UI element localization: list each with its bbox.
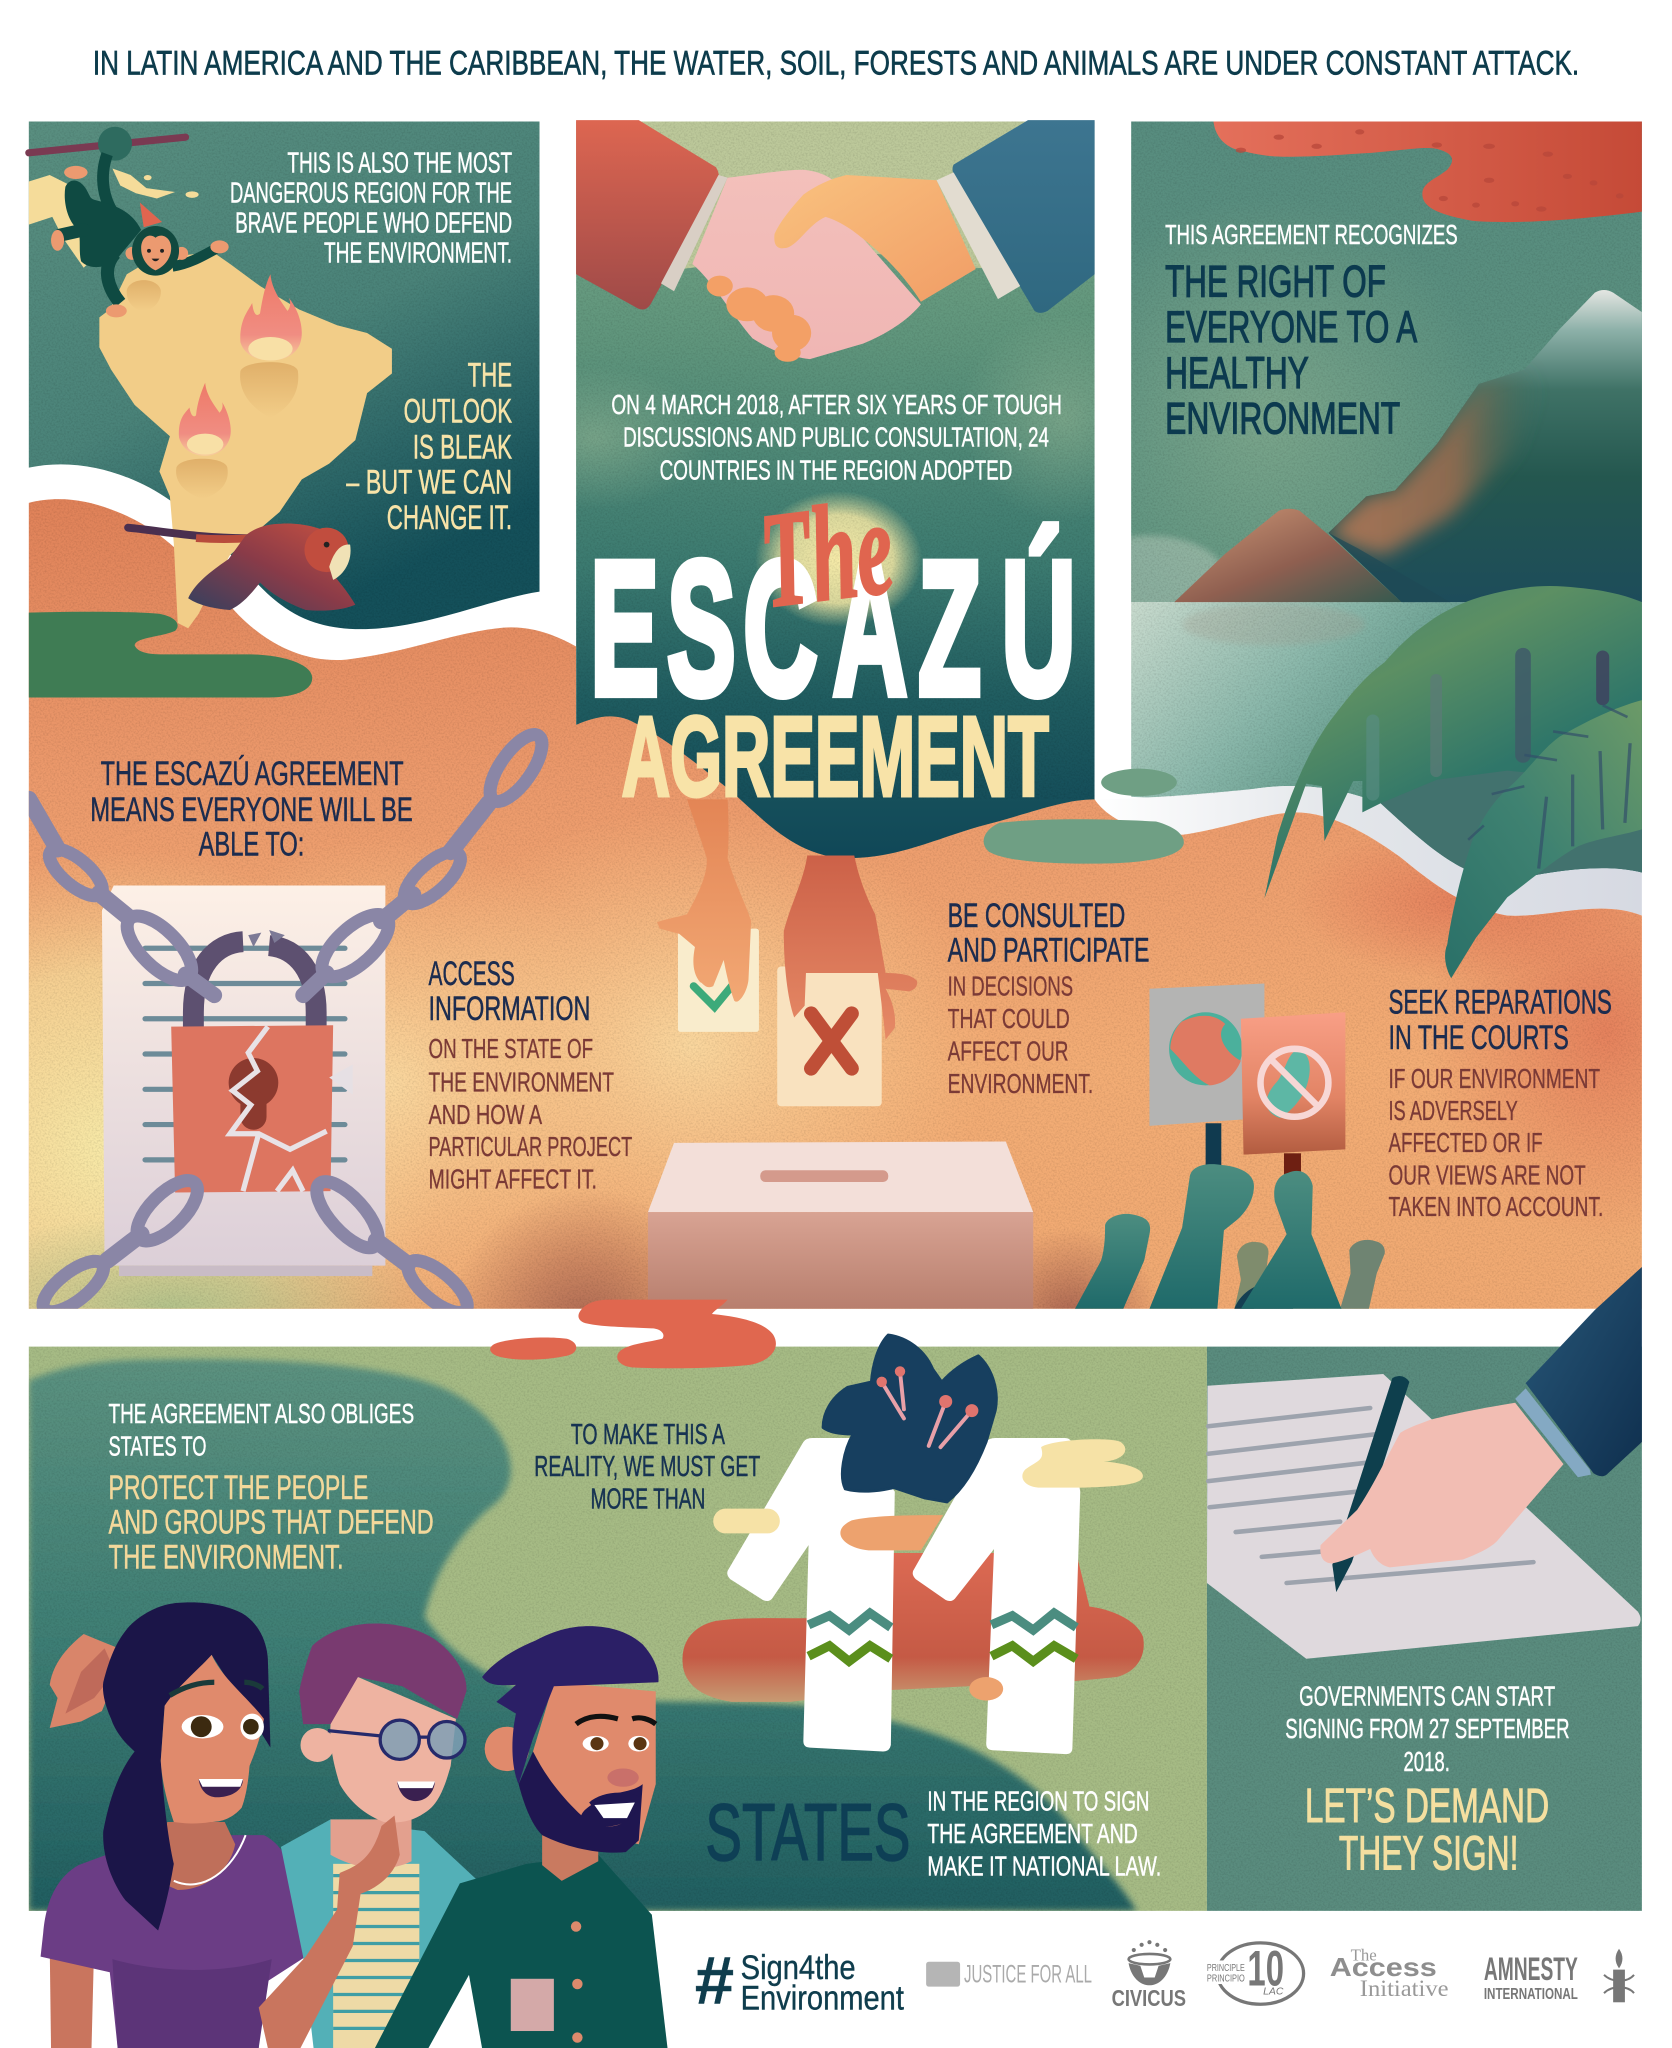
illustration: green pool	[29, 612, 312, 697]
text: agreement obliges states	[108, 1398, 434, 1577]
illustration: number 11 with decorations	[682, 1335, 1144, 1754]
illustration: floating stones	[984, 769, 1184, 864]
text: outlook is bleak: IS BLEAK	[413, 428, 512, 466]
left arm	[657, 799, 751, 1002]
raised hand	[259, 1816, 400, 2048]
text: escazú means everyone: THE ESCAZÚ AGREEMENT	[101, 755, 404, 793]
heading: the right: ENVIRONMENT	[1165, 395, 1400, 444]
Central America	[29, 175, 102, 268]
panel: centre background	[576, 122, 1095, 858]
main heading: The Escazú Agreement: ESCAZÚ	[590, 523, 1075, 735]
illustration: red splash	[490, 1300, 776, 1368]
back arms	[1234, 1242, 1269, 1309]
person: man in glasses	[259, 1624, 479, 2048]
call to action: let's demand they sign	[1305, 1779, 1549, 1881]
hair	[299, 1624, 467, 1724]
jacket	[281, 1819, 479, 2048]
text: escazú means everyone: ABLE TO:	[199, 826, 304, 864]
hand	[1320, 1403, 1564, 1567]
numeral 1 left	[727, 1438, 895, 1752]
text: in the region to sign: IN THE REGION TO SIGN	[927, 1785, 1149, 1816]
panel: top-left background	[29, 121, 540, 629]
lily flower	[823, 1335, 996, 1502]
text: access information: MIGHT AFFECT IT.	[428, 1164, 597, 1195]
text: in the region to sign: THE AGREEMENT AND	[927, 1818, 1138, 1849]
logo: the access initiative: The	[1351, 1945, 1377, 1964]
hair	[482, 1626, 659, 1784]
text: access information: ACCESS	[428, 955, 515, 993]
blue sleeve	[953, 120, 1095, 313]
text: agreement obliges states: THE AGREEMENT ALSO OBLIGES	[108, 1398, 414, 1429]
sleeve	[1526, 1267, 1642, 1476]
text: access information: ON THE STATE OF	[428, 1033, 593, 1064]
text: governments can start signing: 2018.	[1404, 1746, 1450, 1777]
lock body	[171, 1025, 333, 1192]
footer hashtag	[695, 1944, 904, 2019]
main heading: The Escazú Agreement	[590, 472, 1075, 820]
logo: principle 10: PRINCIPIO	[1207, 1973, 1245, 1984]
paper	[102, 886, 385, 1266]
illustration: mountains	[1174, 290, 1642, 602]
numeral 1 right	[913, 1438, 1080, 1754]
heading: the right: THE RIGHT OF	[1165, 257, 1386, 306]
front arms and fists	[1075, 1214, 1150, 1309]
text: be consulted: AFFECT OUR	[948, 1036, 1068, 1067]
logo: justice for all: JUSTICE FOR ALL	[964, 1962, 1092, 1989]
text: escazú means everyone: MEANS EVERYONE WILL BE	[90, 791, 413, 829]
red sign	[1241, 1012, 1345, 1155]
red sleeve	[576, 120, 719, 310]
text: in the region to sign	[927, 1785, 1161, 1882]
heading: the right: HEALTHY	[1165, 349, 1309, 398]
text: outlook is bleak	[346, 357, 512, 537]
text: seek reparations: IS ADVERSELY	[1388, 1095, 1518, 1126]
text: outlook is bleak: OUTLOOK	[404, 393, 512, 431]
footer hashtag: Sign4the	[741, 1949, 856, 1987]
sticks	[1206, 1123, 1221, 1170]
logo: principle 10	[1207, 1940, 1304, 2004]
zigzag stripes	[809, 1613, 1076, 1661]
text: adoption intro: DISCUSSIONS AND PUBLIC CONSULTATION, 24	[623, 422, 1049, 453]
right arm	[784, 856, 917, 1040]
flower in hair	[50, 1634, 119, 1728]
logo: the access initiative: Initiative	[1360, 1976, 1449, 2002]
logo: the access initiative	[1330, 1945, 1449, 2002]
text: seek reparations	[1388, 984, 1612, 1222]
illustration: palm leaves	[1264, 586, 1642, 978]
text: dangerous region: THE ENVIRONMENT.	[324, 238, 512, 270]
text: be consulted	[948, 897, 1149, 1099]
yellow and orange pills	[713, 1509, 780, 1533]
text: agreement obliges states: STATES TO	[108, 1431, 206, 1462]
illustration: handshake	[576, 120, 1095, 362]
logo: amnesty international: INTERNATIONAL	[1484, 1986, 1578, 2003]
illustration: flying macaw	[128, 524, 355, 611]
lake	[1131, 602, 1642, 880]
chains	[29, 727, 551, 1321]
text: adoption intro: ON 4 MARCH 2018, AFTER SIX YEARS OF TOUGH	[611, 389, 1062, 420]
logo: principle 10: PRINCIPLE	[1207, 1963, 1245, 1974]
call to action: let's demand they sign: THEY SIGN!	[1339, 1827, 1518, 1881]
logo: civicus: CIVICUS	[1112, 1985, 1186, 2011]
big word: states: STATES	[705, 1788, 910, 1878]
text: access information	[428, 955, 632, 1195]
icon: flame small	[176, 383, 231, 499]
red cloud	[682, 1553, 1144, 1702]
green hill	[29, 1359, 1136, 1911]
person: woman	[41, 1602, 306, 2048]
text: be consulted: BE CONSULTED	[948, 897, 1125, 935]
shackle	[193, 942, 316, 1032]
panel: bottom background	[29, 1347, 1642, 1911]
logo: justice for all	[926, 1962, 1092, 1989]
text: agreement obliges states: THE ENVIRONMENT.	[108, 1539, 344, 1577]
face	[161, 1655, 264, 1824]
branch	[29, 137, 186, 153]
text: seek reparations: AFFECTED OR IF	[1388, 1127, 1543, 1158]
text: seek reparations: OUR VIEWS ARE NOT	[1388, 1160, 1586, 1191]
mouth	[199, 1779, 243, 1797]
text: dangerous region	[230, 147, 512, 270]
text: right to healthy environment	[1165, 219, 1458, 444]
main heading: The Escazú Agreement: AGREEMENT	[622, 693, 1049, 820]
text: adoption intro	[611, 389, 1062, 485]
hair	[103, 1602, 270, 1930]
illustration: ballot box	[648, 1142, 1033, 1309]
text: right to healthy environment: THIS AGREEMENT RECOGNIZES	[1165, 219, 1458, 250]
icon: flame large	[240, 274, 302, 418]
text: outlook is bleak: – BUT WE CAN	[346, 464, 512, 502]
logo: principle 10: 10	[1247, 1940, 1284, 1996]
right ballot	[777, 967, 882, 1106]
text: be consulted: AND PARTICIPATE	[948, 931, 1149, 969]
red blob with spots	[1213, 121, 1642, 222]
logo: civicus	[1112, 1940, 1186, 2011]
face	[330, 1677, 456, 1822]
left ballot	[678, 929, 759, 1032]
illustration: protest signs and raised fists	[1075, 984, 1385, 1309]
illustration: hands casting votes	[657, 799, 917, 1106]
text: to make this a reality: MORE THAN	[590, 1484, 705, 1516]
panel: top-right background	[1131, 122, 1642, 916]
illustration: signing hand and document	[1207, 1267, 1642, 1659]
logo: the access initiative: Access	[1330, 1952, 1437, 1982]
text: agreement obliges states: PROTECT THE PEOPLE	[108, 1469, 368, 1507]
footer hashtag: Environment	[741, 1979, 904, 2017]
pen	[1332, 1376, 1409, 1592]
illustration: hanging monkey	[29, 127, 229, 317]
text: agreement obliges states: AND GROUPS THAT DEFEND	[108, 1503, 434, 1541]
pink hand	[692, 170, 921, 359]
main heading: The Escazú Agreement: The	[753, 472, 901, 636]
orange fingers	[707, 276, 811, 362]
text: access information: THE ENVIRONMENT	[428, 1066, 614, 1097]
footer hashtag: #	[695, 1944, 734, 2019]
text: to make this a reality	[534, 1419, 760, 1516]
text: be consulted: THAT COULD	[948, 1003, 1070, 1034]
text: adoption intro: COUNTRIES IN THE REGION ADOPTED	[660, 454, 1012, 485]
eyes	[182, 1715, 223, 1738]
text: dangerous region: THIS IS ALSO THE MOST	[287, 147, 512, 179]
text: escazú means everyone	[90, 755, 413, 864]
text: governments can start signing: GOVERNMENTS CAN START	[1299, 1681, 1555, 1712]
left arm skin	[50, 1958, 94, 2048]
text: governments can start signing	[1285, 1681, 1570, 1777]
text: access information: PARTICULAR PROJECT	[428, 1131, 632, 1162]
text: access information: AND HOW A	[428, 1099, 543, 1130]
panel: main orange section	[28, 499, 1642, 1309]
glasses	[328, 1720, 465, 1759]
heading: the right: EVERYONE TO A	[1165, 303, 1417, 352]
logo: amnesty international	[1484, 1949, 1634, 2003]
text: be consulted: ENVIRONMENT.	[948, 1068, 1093, 1099]
illustration: South America map	[29, 168, 392, 628]
logo: amnesty international: AMNESTY	[1484, 1950, 1578, 1987]
illustration: three activists	[41, 1602, 668, 2048]
panel: bottom-right signing	[1207, 1347, 1642, 1911]
text: seek reparations: IN THE COURTS	[1388, 1019, 1569, 1057]
illustration: document with broken padlock and chains	[29, 727, 551, 1321]
orange hand	[774, 175, 976, 302]
beard	[519, 1752, 643, 1853]
text: dangerous region: DANGEROUS REGION FOR THE	[230, 177, 512, 209]
shirt	[375, 1855, 668, 2048]
text: access information: INFORMATION	[428, 990, 590, 1028]
eyes and brows	[583, 1736, 609, 1752]
text: outlook is bleak: THE	[468, 357, 512, 395]
text: be consulted: IN DECISIONS	[948, 970, 1073, 1001]
striped shirt	[333, 1864, 419, 2048]
logo: principle 10: LAC	[1263, 1986, 1284, 1997]
text: to make this a reality: REALITY, WE MUST GET	[534, 1451, 760, 1483]
call to action: let's demand they sign: LET’S DEMAND	[1305, 1779, 1549, 1833]
text: to make this a reality: TO MAKE THIS A	[571, 1419, 726, 1451]
heading: the right	[1165, 257, 1417, 444]
text: in the region to sign: MAKE IT NATIONAL LAW.	[927, 1851, 1161, 1882]
grey sign	[1149, 984, 1264, 1126]
dress	[41, 1835, 306, 2048]
text: outlook is bleak: CHANGE IT.	[387, 499, 512, 537]
shore band	[1095, 786, 1642, 916]
face	[533, 1682, 656, 1844]
person: bearded man	[375, 1626, 668, 2048]
text: dangerous region: BRAVE PEOPLE WHO DEFEND	[235, 207, 512, 239]
